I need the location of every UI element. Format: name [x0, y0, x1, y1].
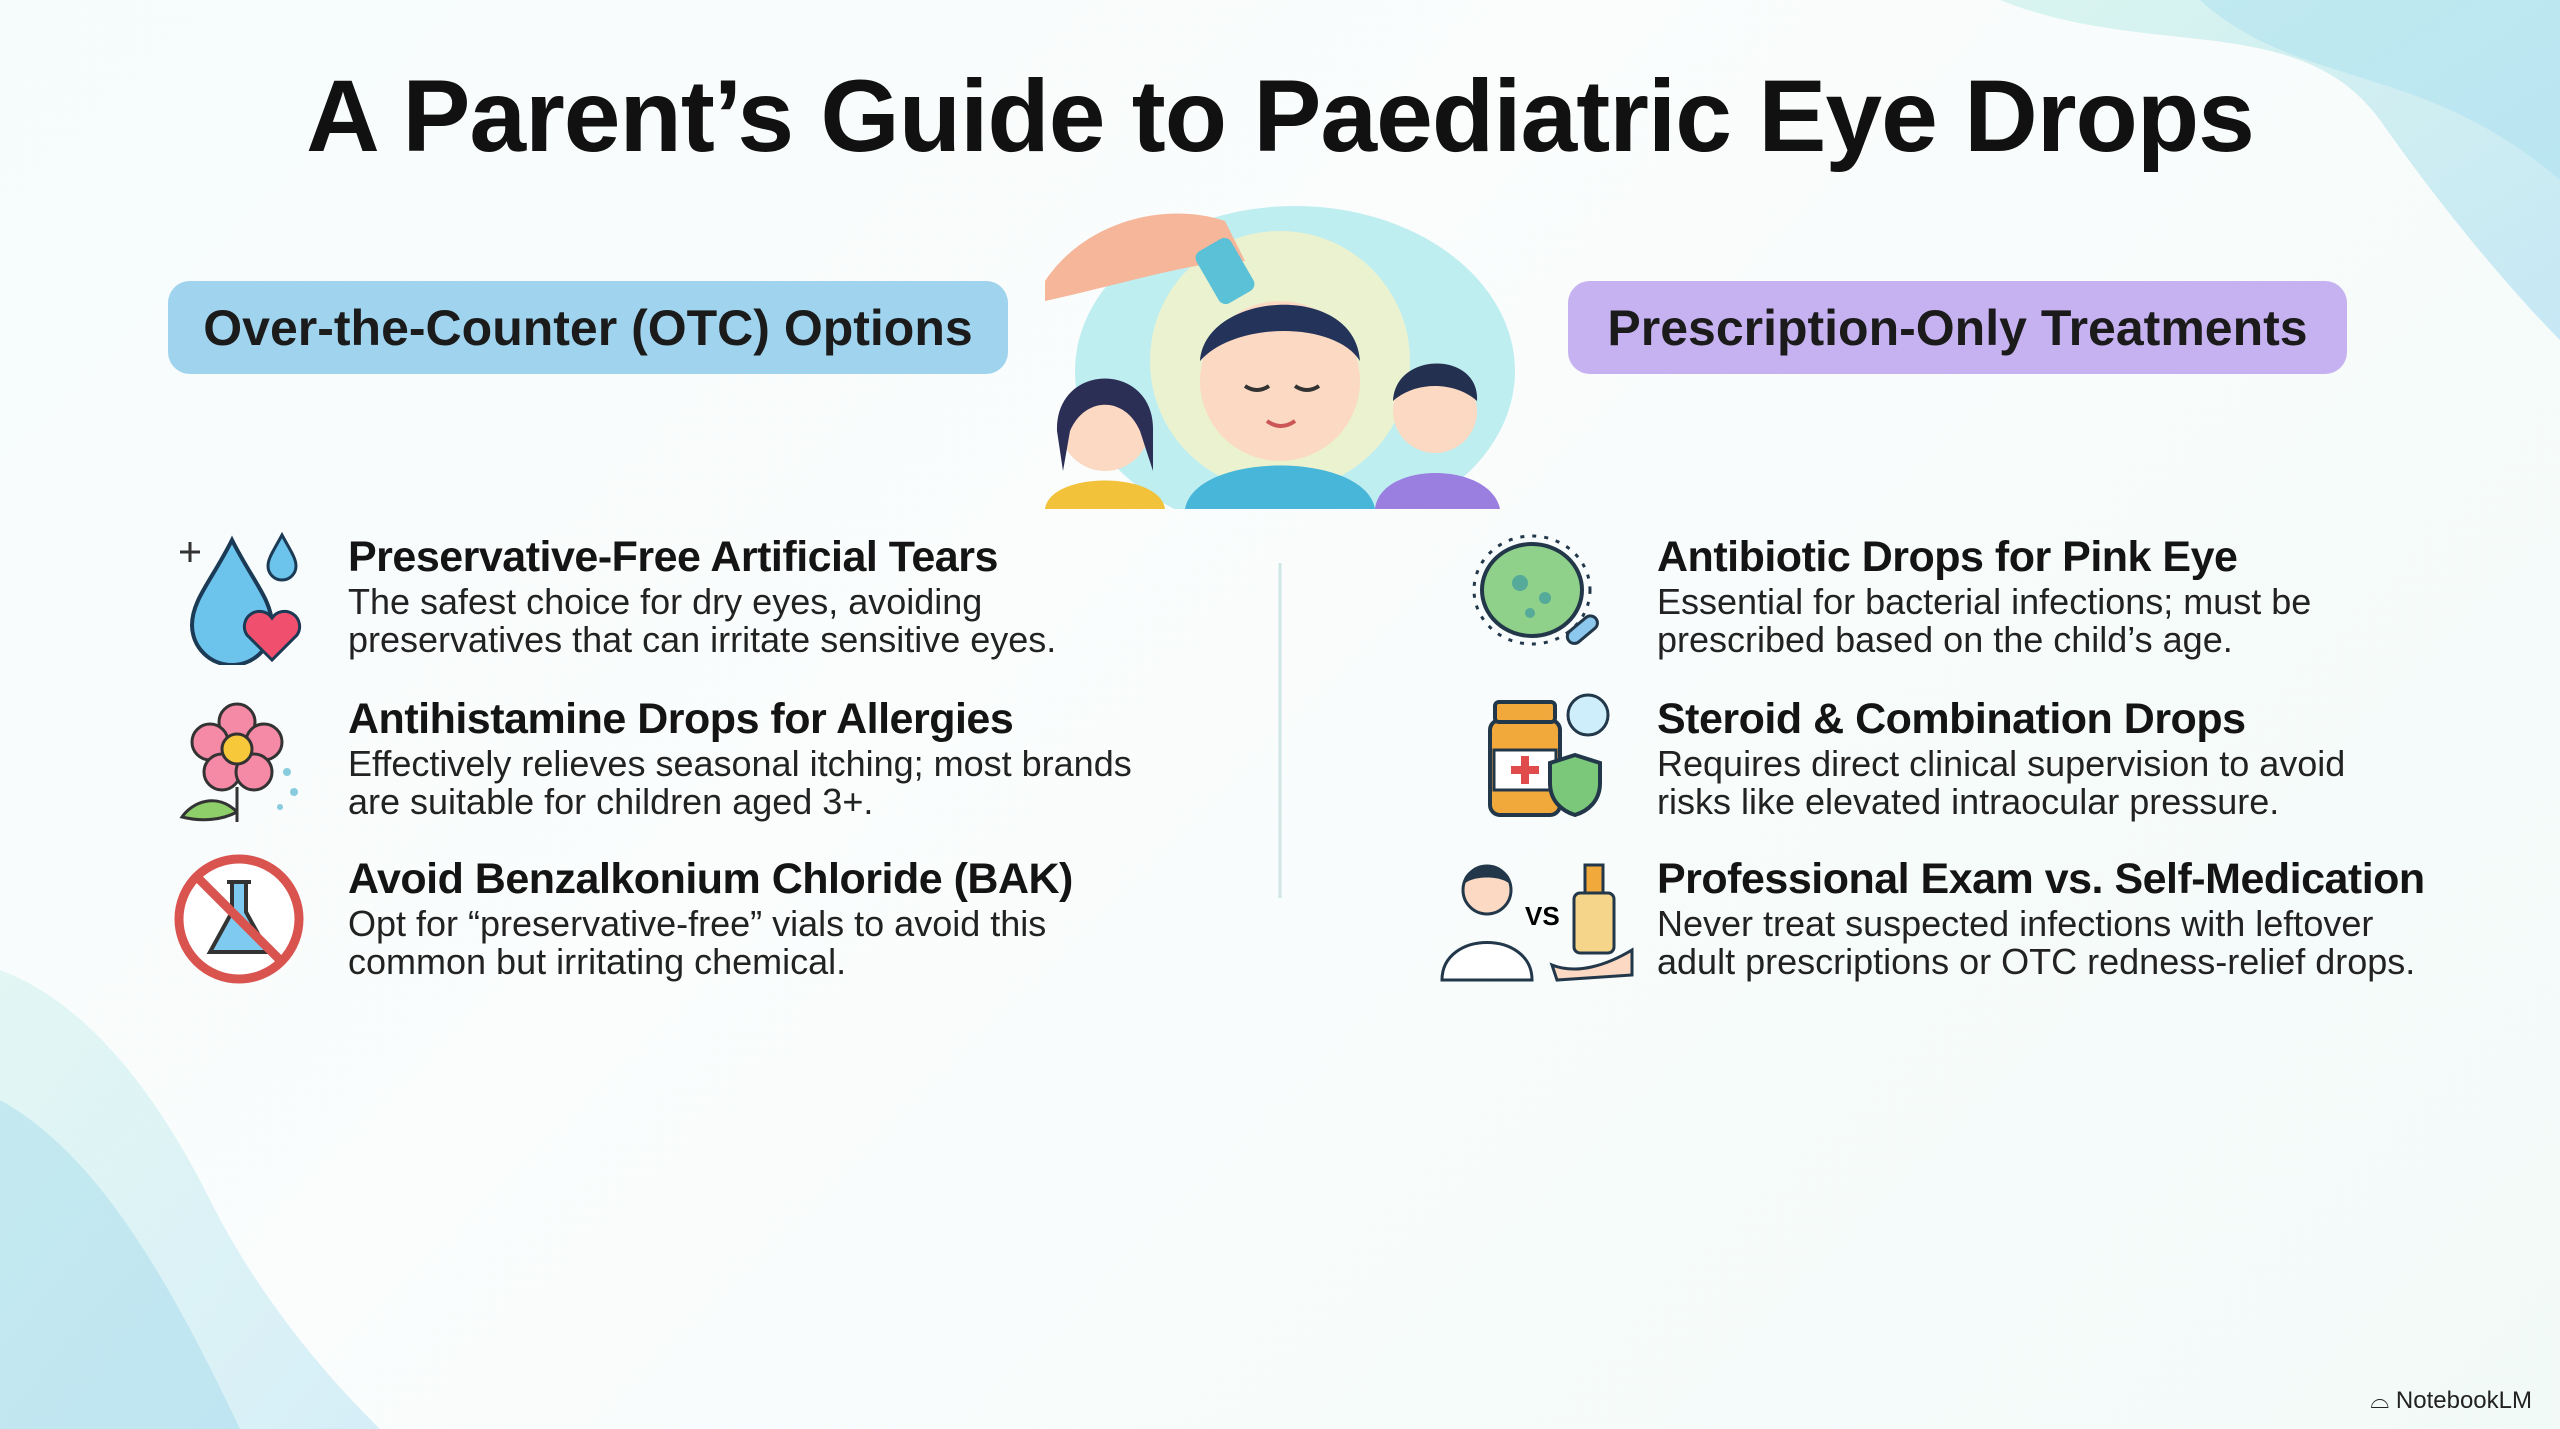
icon: bacteria [1472, 534, 1599, 646]
text: steroid: Requires direct clinical supervision to avoid [1657, 743, 2345, 784]
logo: ⌓ NotebookLM [2370, 1387, 2532, 1414]
text: preservative-free tears: Preservative-Free Artificial Tears [348, 533, 998, 581]
text: avoid BAK: common but irritating chemical. [348, 941, 846, 982]
icon: doctor vs bottle: VS [1525, 901, 1560, 931]
text: steroid [1657, 695, 2345, 822]
text: professional exam: Professional Exam vs. Self-Medication [1657, 855, 2425, 903]
icon: pill bottle with shield [1488, 694, 1610, 818]
text: preservative-free tears: The safest choice for dry eyes, avoiding [348, 581, 982, 622]
text: antihistamine [348, 695, 1132, 822]
illustration: child receiving eye drops [1045, 206, 1515, 509]
icon: flower [180, 702, 298, 822]
text: steroid: risks like elevated intraocular pressure. [1657, 781, 2279, 822]
icon: water drop with heart [180, 532, 302, 665]
icon: doctor vs bottle [1440, 864, 1634, 982]
text: antihistamine: Effectively relieves seasonal itching; most brands [348, 743, 1132, 784]
text: steroid: Steroid & Combination Drops [1657, 695, 2246, 743]
text: avoid BAK: Avoid Benzalkonium Chloride (BAK) [348, 855, 1073, 903]
text: avoid BAK: Opt for “preservative-free” vials to avoid this [348, 903, 1046, 944]
text: antihistamine: Antihistamine Drops for Allergies [348, 695, 1013, 743]
text: antibiotic: Essential for bacterial infections; must be [1657, 581, 2311, 622]
text: professional exam: Never treat suspected infections with leftover [1657, 903, 2373, 944]
text: antihistamine: are suitable for children aged 3+. [348, 781, 873, 822]
pill: OTC heading [168, 281, 1008, 374]
text: preservative-free tears: preservatives that can irritate sensitive eyes. [348, 619, 1056, 660]
pill: prescription heading: Prescription-Only Treatments [1607, 300, 2308, 356]
text: antibiotic [1657, 533, 2311, 660]
pill: OTC heading: Over-the-Counter (OTC) Options [203, 300, 973, 356]
text: professional exam: adult prescriptions or OTC redness-relief drops. [1657, 941, 2415, 982]
text: preservative-free tears [348, 533, 1056, 660]
text: antibiotic: prescribed based on the child’s age. [1657, 619, 2233, 660]
icon: no chemicals [174, 854, 304, 984]
text: antibiotic: Antibiotic Drops for Pink Eye [1657, 533, 2237, 581]
title: A Parent’s Guide to Paediatric Eye Drops [306, 59, 2254, 173]
text: avoid BAK [348, 855, 1073, 982]
text: professional exam [1657, 855, 2425, 982]
pill: prescription heading [1568, 281, 2347, 374]
